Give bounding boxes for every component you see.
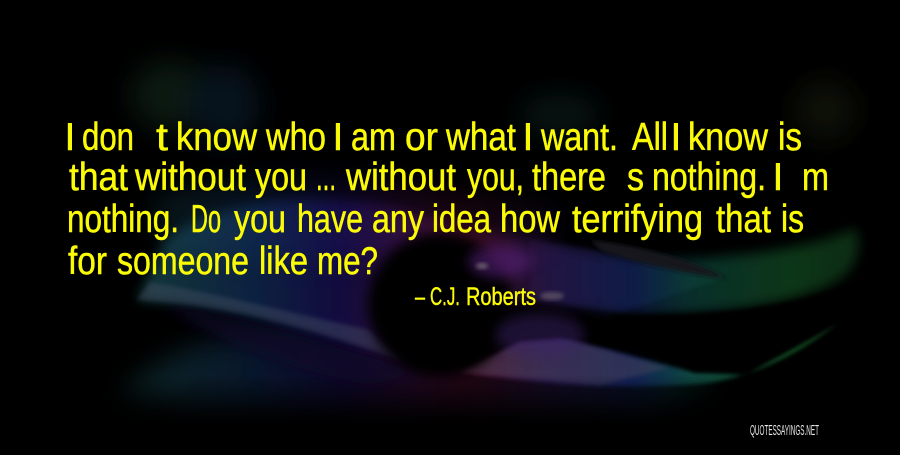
quote line 3: is xyxy=(781,198,804,241)
quote line 2: nothing. xyxy=(652,156,766,199)
quote line 3: nothing. xyxy=(67,198,179,241)
quote line 2: ... xyxy=(316,156,336,199)
background: bottom fade xyxy=(0,375,900,425)
quote line 3: any xyxy=(372,198,424,241)
author attribution: – xyxy=(415,283,425,311)
quote line 1: or xyxy=(405,116,438,159)
quote line 1: All xyxy=(632,116,668,159)
quote line 2: that xyxy=(69,156,128,199)
quote line 3: have xyxy=(297,198,363,241)
quote line 1: I xyxy=(332,116,343,159)
quote line 1: want. xyxy=(540,116,618,159)
author attribution xyxy=(415,283,536,311)
quote line 2: without xyxy=(134,156,246,199)
quote line 1: t xyxy=(156,116,168,159)
quote line 1: I xyxy=(522,116,533,159)
quote line 4: for xyxy=(68,240,107,283)
quote line 1: who xyxy=(265,116,326,159)
background: dark circle xyxy=(368,233,512,377)
quote line 3: how xyxy=(500,198,561,241)
quote line 3: terrifying xyxy=(572,198,703,241)
quote line 2: you xyxy=(255,156,307,199)
quote line 1: is xyxy=(778,116,802,159)
quote line 1: what xyxy=(445,116,516,159)
quote line 1: know xyxy=(176,116,258,159)
background: black crescent on the right xyxy=(610,285,845,372)
background: faint smoke at the top xyxy=(130,60,855,145)
quote line 2 xyxy=(69,156,829,199)
quote line 3: Do xyxy=(191,198,221,241)
quote line 3: you xyxy=(234,198,286,241)
quote line 3: that xyxy=(716,198,771,241)
author attribution: C.J. xyxy=(430,283,460,311)
quote line 1: I xyxy=(670,116,681,159)
quote line 4 xyxy=(68,240,378,283)
quote line 2: m xyxy=(802,156,829,199)
quote line 2: I xyxy=(772,156,783,199)
quote line 2: you, xyxy=(467,156,524,199)
quote line 4: like xyxy=(259,240,308,283)
quote line 1: know xyxy=(688,116,769,159)
quote line 4: me? xyxy=(317,240,378,283)
background: purple blossoms xyxy=(468,246,585,357)
quote line 1: am xyxy=(351,116,396,159)
quote line 2: without xyxy=(345,156,456,199)
quote line 2: s xyxy=(627,156,644,199)
author attribution: Roberts xyxy=(466,283,536,311)
quote line 3: idea xyxy=(432,198,491,241)
quote line 2: there xyxy=(532,156,606,199)
quote line 1: I xyxy=(64,116,75,159)
quote line 3 xyxy=(67,198,804,241)
quote line 4: someone xyxy=(117,240,249,283)
background: dark blade shape xyxy=(590,240,727,279)
quote line 1: don xyxy=(82,116,134,159)
background: colourful swoosh xyxy=(120,178,858,425)
quote line 1 xyxy=(64,116,802,159)
